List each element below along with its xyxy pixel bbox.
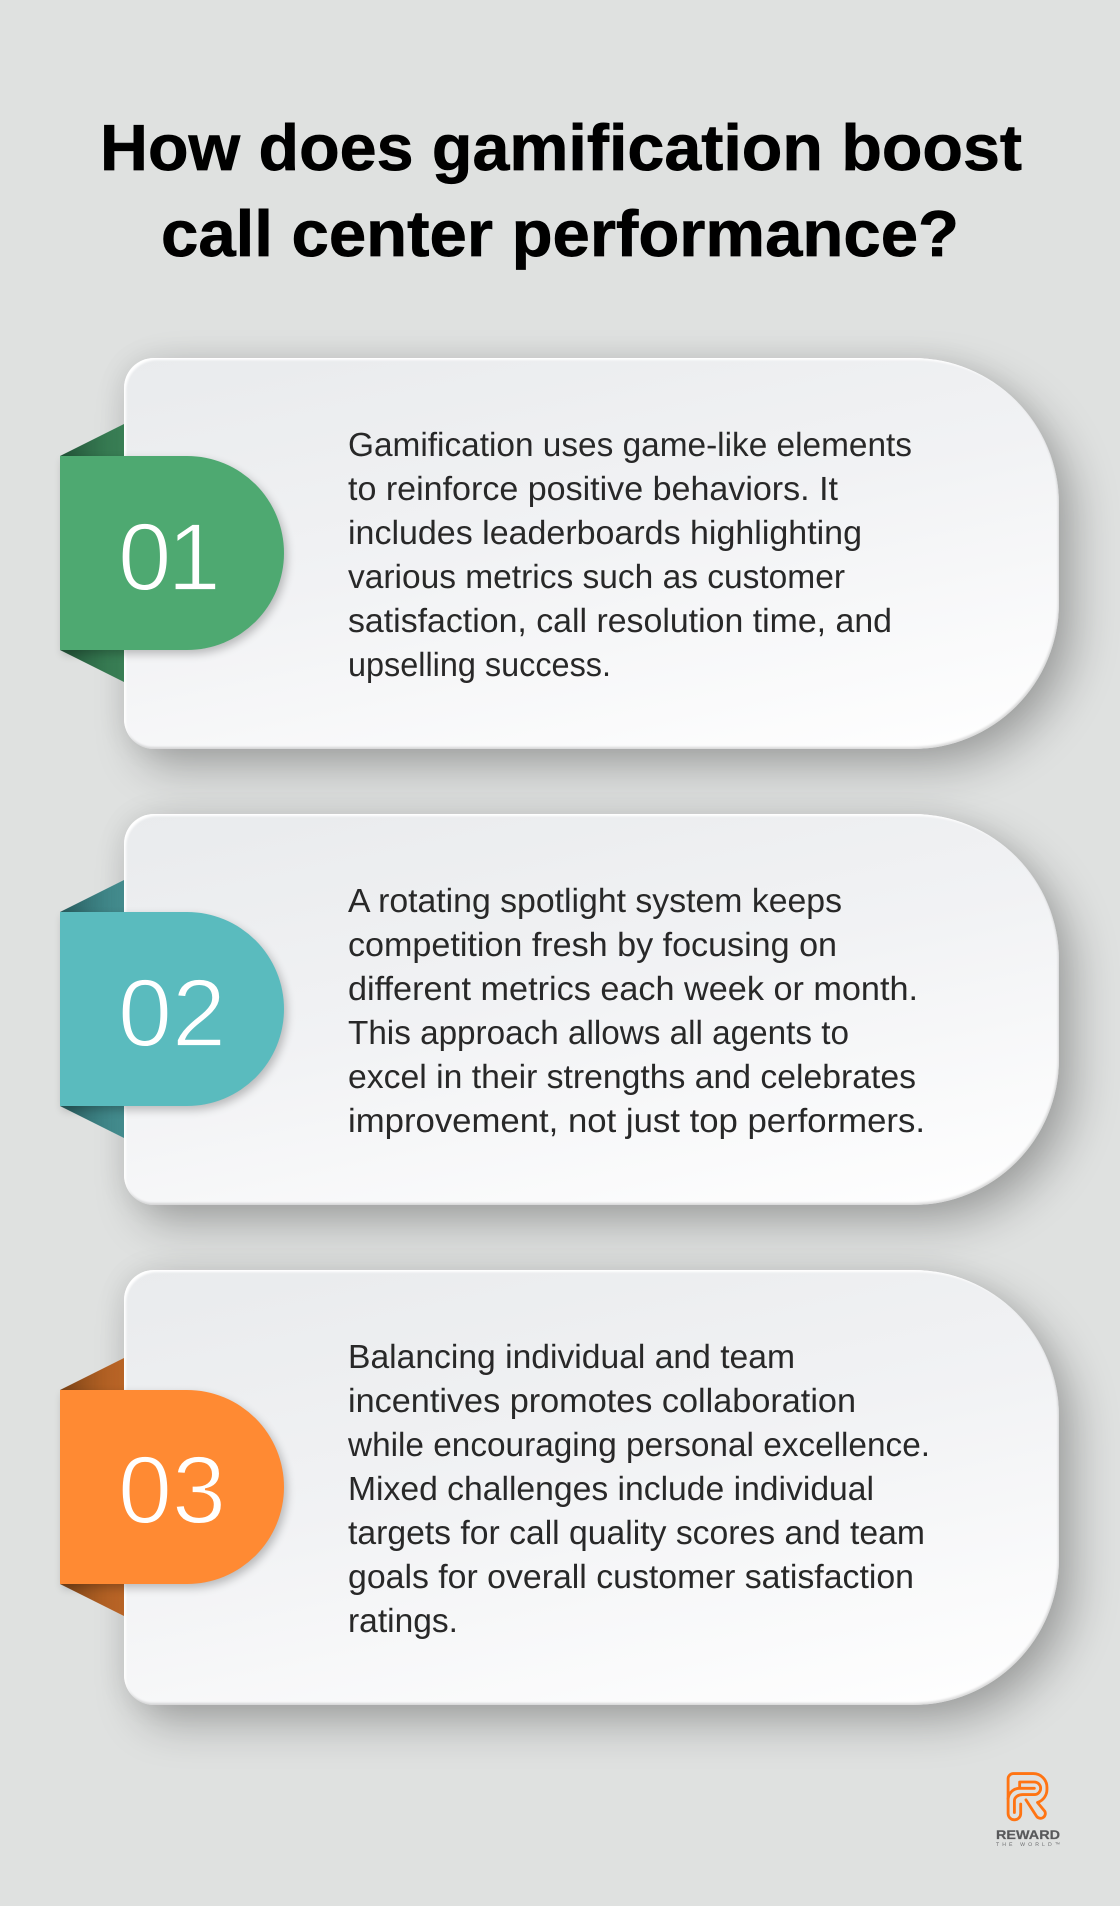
ribbon fold: step 02 — [60, 880, 124, 1138]
text: step 01: Gamification uses game-like elements — [348, 427, 912, 464]
text: step 01: upselling success. — [348, 647, 611, 684]
text: step 01: various metrics such as customer — [348, 559, 845, 596]
text: step 03: Mixed challenges include individual — [348, 1471, 874, 1508]
text: step 03: goals for overall customer satisfaction — [348, 1559, 914, 1596]
text: step 02: different metrics each week or month. — [348, 971, 918, 1008]
text: step 02: This approach allows all agents to — [348, 1015, 849, 1052]
card: step 01 — [124, 358, 1059, 749]
card: step 02 — [124, 814, 1059, 1205]
text: step 02: excel in their strengths and celebrates — [348, 1059, 916, 1096]
text: step 02 — [348, 883, 925, 1140]
logo: Reward the World — [996, 1772, 1060, 1848]
badge: 01 — [60, 456, 284, 650]
ribbon fold: step 01 — [60, 424, 124, 682]
text: step 02: improvement, not just top performers. — [348, 1103, 925, 1140]
text: step 02: A rotating spotlight system keeps — [348, 883, 842, 920]
text: step 03: Balancing individual and team — [348, 1339, 795, 1376]
title: How does gamification boost — [100, 111, 1022, 184]
panel: step 01 — [58, 347, 1098, 790]
title — [100, 111, 1022, 270]
text: step 02: competition fresh by focusing on — [348, 927, 837, 964]
text: step 03: targets for call quality scores and team — [348, 1515, 925, 1552]
text: step 01: includes leaderboards highlighting — [348, 515, 862, 552]
text: step 01: to reinforce positive behaviors. It — [348, 471, 839, 508]
panel: step 02 — [58, 803, 1098, 1246]
ribbon fold: step 03 — [60, 1358, 124, 1616]
badge: 03 — [60, 1390, 284, 1584]
tagline: THE WORLD™ — [996, 1842, 1060, 1848]
badge: 01: 01 — [118, 504, 221, 611]
text: step 01: satisfaction, call resolution time, and — [348, 603, 892, 640]
text: step 03: while encouraging personal excellence. — [347, 1427, 930, 1464]
card: step 03 — [124, 1270, 1059, 1705]
text: step 01 — [348, 427, 912, 684]
badge: 03: 03 — [118, 1437, 226, 1544]
title: call center performance? — [161, 197, 959, 270]
wordmark: REWARD — [996, 1828, 1060, 1842]
icon: R mark — [1008, 1774, 1047, 1820]
text: step 03: ratings. — [348, 1603, 458, 1640]
badge: 02 — [60, 912, 284, 1106]
panel: step 03 — [58, 1259, 1098, 1746]
badge: 02: 02 — [118, 960, 226, 1067]
text: step 03 — [347, 1339, 930, 1640]
text: step 03: incentives promotes collaboration — [348, 1383, 856, 1420]
